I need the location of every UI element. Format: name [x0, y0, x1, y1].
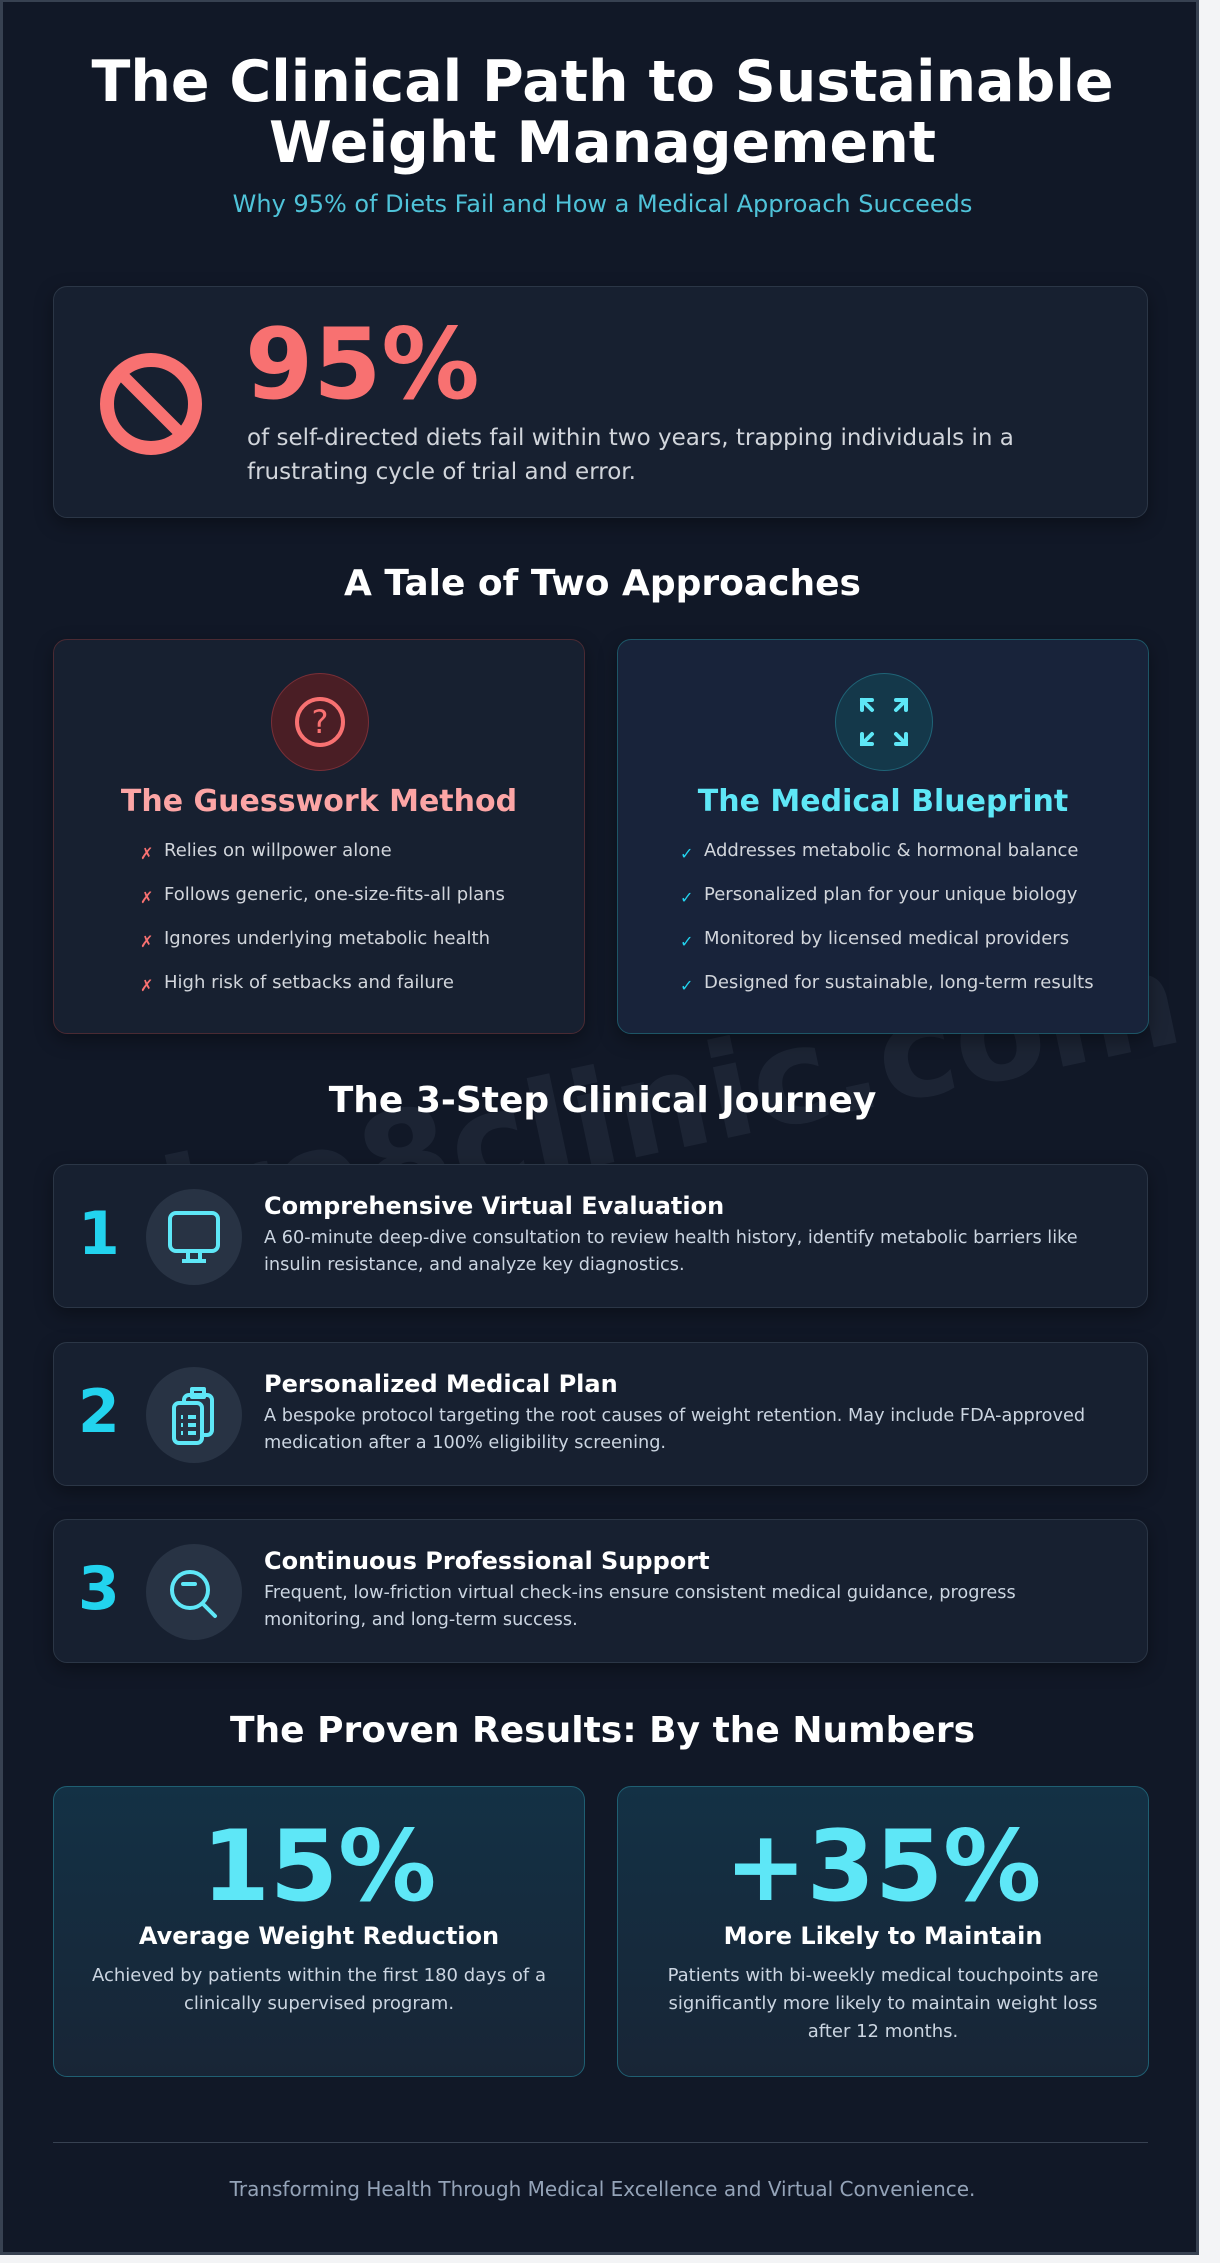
icon: prohibited: [100, 353, 202, 455]
title: The Clinical Path to Sustainable: [91, 49, 1114, 115]
step desc: A 60-minute deep-dive consultation to review health history, identify metabolic barriers like insulin resistance, and analyze key diagnostics.: [264, 1228, 1078, 1275]
list: ✓: [680, 844, 693, 863]
list: Monitored by licensed medical providers: [704, 928, 1069, 949]
list: Ignores underlying metabolic health: [164, 928, 490, 949]
list: ✗: [140, 932, 153, 951]
number: 2: [78, 1377, 120, 1447]
heading: results: The Proven Results: By the Numbers: [230, 1710, 975, 1751]
big number: +35%: [725, 1810, 1041, 1924]
title: [91, 49, 1114, 176]
icon: question: [271, 673, 369, 771]
list: [140, 840, 505, 995]
icon: clipboard: [146, 1367, 242, 1463]
label: More Likely to Maintain: [724, 1922, 1042, 1950]
number: 3: [78, 1554, 120, 1624]
card title: The Guesswork Method: [121, 784, 517, 819]
step 1: [53, 1164, 1148, 1308]
card title: The Medical Blueprint: [698, 784, 1068, 819]
list: Relies on willpower alone: [164, 840, 392, 861]
step desc: Frequent, low-friction virtual check-ins ensure consistent medical guidance, progress monitoring, and long-term success.: [264, 1583, 1016, 1630]
number: 1: [78, 1199, 120, 1269]
panel: guesswork: [53, 639, 585, 1034]
big number: 15%: [202, 1810, 436, 1924]
list: ✗: [140, 844, 153, 863]
heading: journey: The 3-Step Clinical Journey: [329, 1080, 876, 1121]
stat text: of self-directed diets fail within two years, trapping individuals in a frustrating cycle of trial and error.: [247, 425, 1014, 485]
stat number: 95%: [245, 308, 480, 422]
icon: search minus: [146, 1544, 242, 1640]
subtitle: Why 95% of Diets Fail and How a Medical Approach Succeeds: [233, 190, 972, 218]
icon: question: ?: [312, 703, 328, 741]
step 3: [53, 1519, 1148, 1663]
heading: two approaches: A Tale of Two Approaches: [344, 563, 861, 604]
icon: expand arrows: [835, 673, 933, 771]
list: ✓: [680, 932, 693, 951]
list: ✓: [680, 888, 693, 907]
desc: Patients with bi-weekly medical touchpoints are significantly more likely to maintain weight loss after 12 months.: [668, 1965, 1098, 2042]
list: Personalized plan for your unique biology: [704, 884, 1077, 905]
list: Designed for sustainable, long-term results: [704, 972, 1094, 993]
result card 2: [617, 1786, 1149, 2077]
list: ✗: [140, 888, 153, 907]
panel: 95% stat: [53, 286, 1148, 518]
step title: Continuous Professional Support: [264, 1547, 710, 1575]
list: Follows generic, one-size-fits-all plans: [164, 884, 505, 905]
list: Addresses metabolic & hormonal balance: [704, 840, 1078, 861]
label: Average Weight Reduction: [139, 1922, 499, 1950]
icon: monitor: [146, 1189, 242, 1285]
footer: Transforming Health Through Medical Excellence and Virtual Convenience.: [230, 2177, 975, 2201]
title: Weight Management: [269, 110, 936, 176]
step title: Comprehensive Virtual Evaluation: [264, 1192, 724, 1220]
step desc: A bespoke protocol targeting the root causes of weight retention. May include FDA-approved medication after a 100% eligibility screening.: [264, 1406, 1085, 1453]
list: High risk of setbacks and failure: [164, 972, 454, 993]
desc: Achieved by patients within the first 180 days of a clinically supervised program.: [92, 1965, 546, 2014]
result card 1: [53, 1786, 585, 2077]
step title: Personalized Medical Plan: [264, 1370, 618, 1398]
list: [680, 840, 1094, 995]
panel: medical blueprint: [617, 639, 1149, 1034]
step 2: [53, 1342, 1148, 1486]
watermark: sire8clinic.com: [73, 921, 1193, 1303]
list: ✗: [140, 976, 153, 995]
list: ✓: [680, 976, 693, 995]
